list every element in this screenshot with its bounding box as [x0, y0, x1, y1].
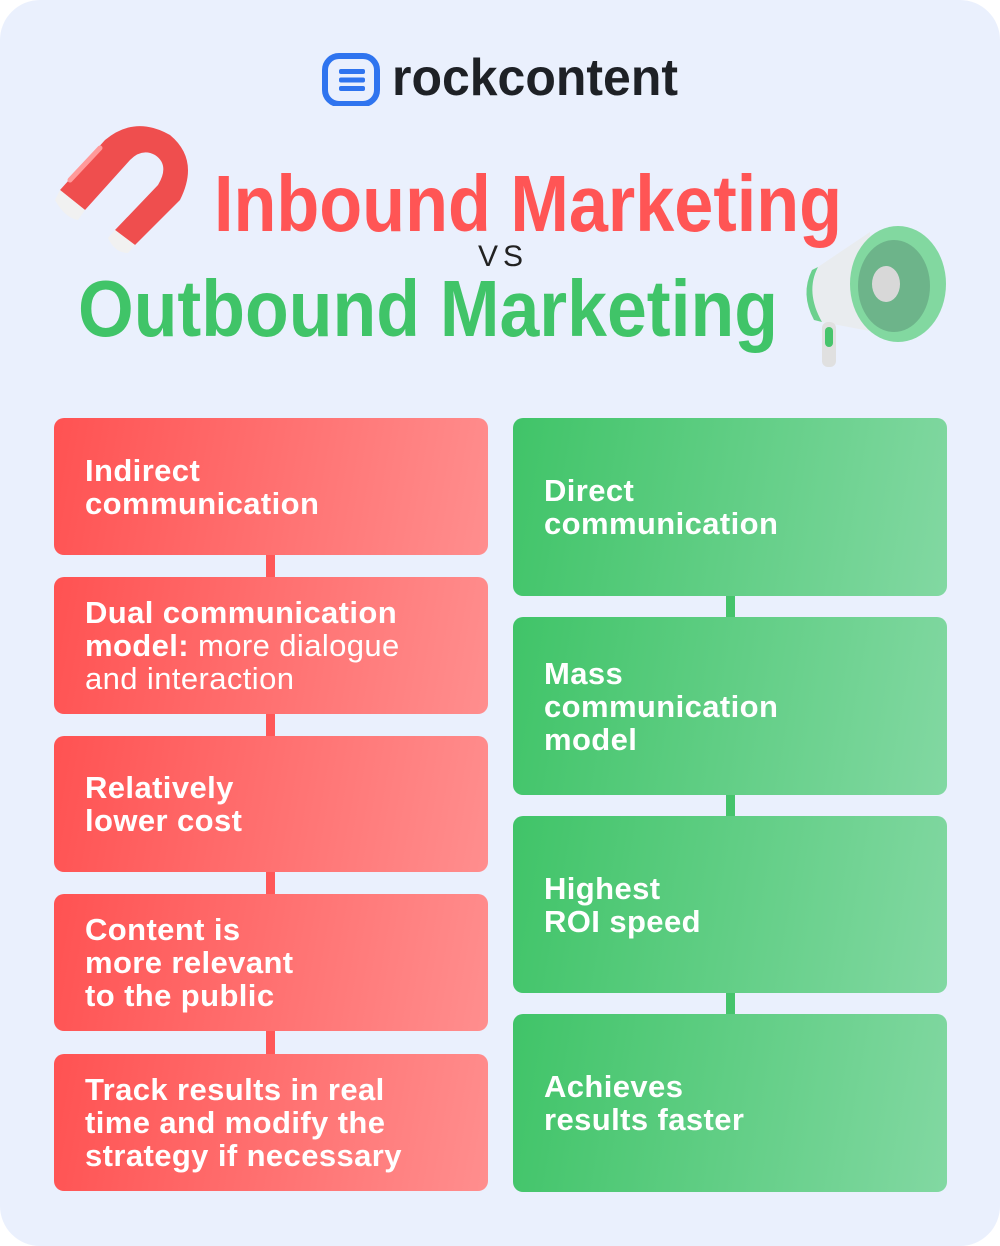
- vs: VS: [478, 240, 528, 273]
- panel: inbound column: [266, 555, 275, 1054]
- card: track results: time and modify the: [85, 1105, 385, 1140]
- panel: outbound column: [726, 596, 735, 1014]
- card: indirect communication: Indirect: [85, 452, 200, 488]
- card: faster results: results faster: [544, 1102, 744, 1137]
- card: relevant content: Content is: [85, 912, 241, 947]
- card: dual communication: model: more dialogue: [85, 628, 400, 663]
- card: faster results: [513, 1014, 947, 1192]
- card: indirect communication: [54, 418, 488, 555]
- card: direct communication: Direct: [544, 473, 634, 508]
- card: lower cost: lower cost: [85, 803, 242, 838]
- card: track results: [54, 1054, 488, 1191]
- card: track results: strategy if necessary: [85, 1138, 402, 1173]
- connector: [726, 588, 735, 1018]
- card: dual communication: [54, 577, 488, 714]
- card: relevant content: [54, 894, 488, 1031]
- card: relevant content: more relevant: [85, 945, 294, 980]
- card: faster results: Achieves: [544, 1069, 683, 1104]
- card: ROI speed: ROI speed: [544, 904, 701, 938]
- card: mass communication: communication: [544, 688, 778, 724]
- icon: magnet: [55, 126, 188, 253]
- card: track results: Track results in real: [85, 1072, 385, 1107]
- card: ROI speed: Highest: [544, 870, 660, 906]
- card: mass communication: Mass: [544, 656, 623, 690]
- connector: [266, 548, 275, 1058]
- card: mass communication: [513, 617, 947, 795]
- card: indirect communication: communication: [85, 486, 319, 520]
- card: direct communication: communication: [544, 506, 778, 541]
- icon: megaphone: [806, 226, 946, 367]
- card: ROI speed: [513, 816, 947, 993]
- card: direct communication: [513, 418, 947, 596]
- card: dual communication: Dual communication: [85, 595, 397, 630]
- card: dual communication: and interaction: [85, 661, 294, 696]
- card: lower cost: [54, 736, 488, 872]
- card: mass communication: model: [544, 722, 637, 756]
- card: relevant content: to the public: [85, 978, 274, 1013]
- card: lower cost: Relatively: [85, 770, 234, 805]
